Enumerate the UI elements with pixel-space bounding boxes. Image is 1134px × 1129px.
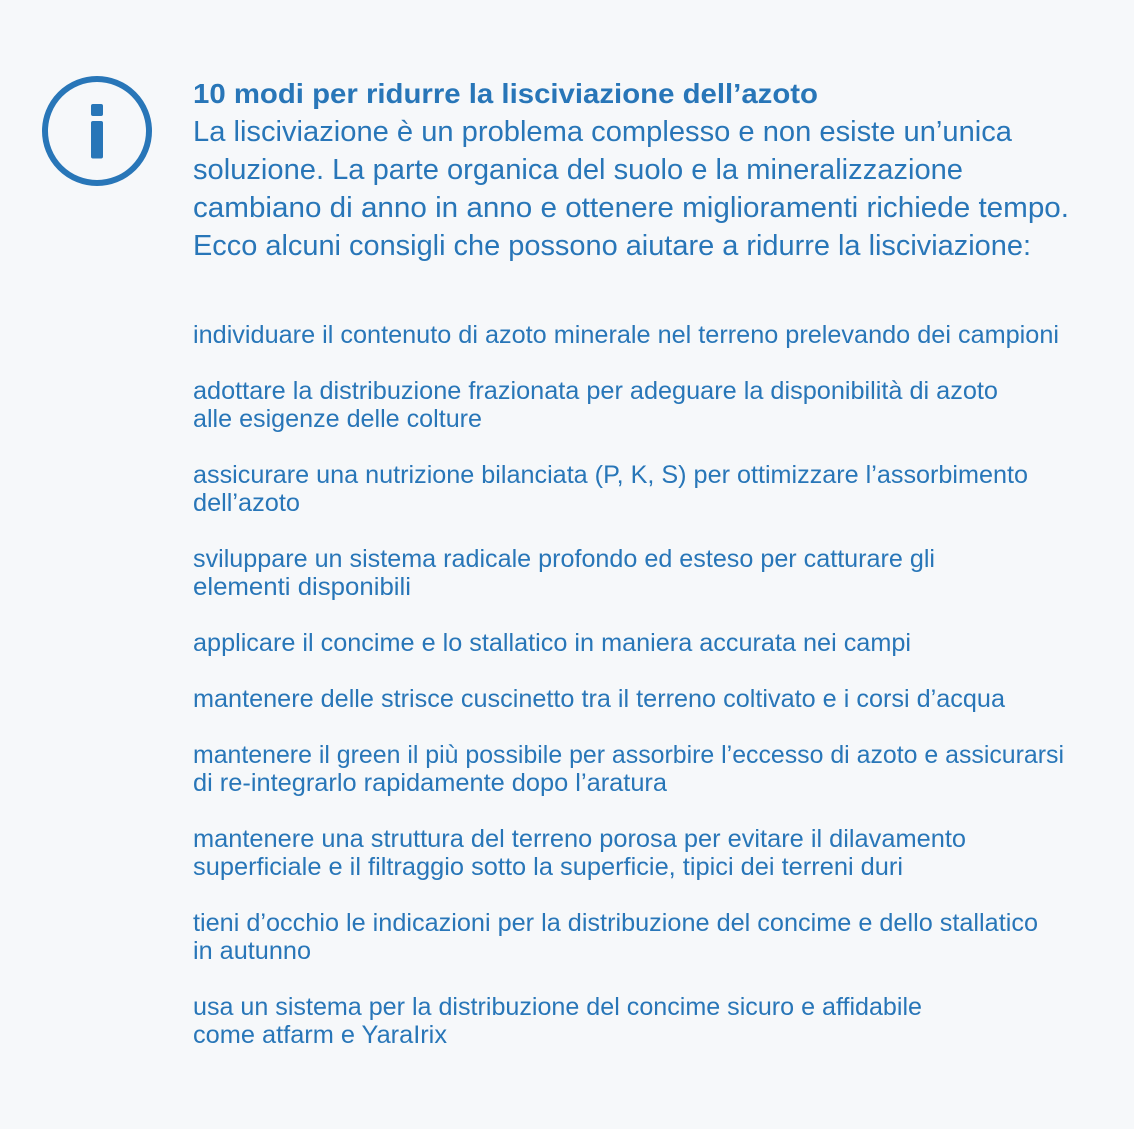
tip 1: individuare il contenuto di azoto minerale nel terreno prelevando dei campioni [193, 321, 1059, 349]
tip 9: tieni d’occhio le indicazioni per la distribuzione del concime e dello stallatico [193, 909, 1038, 937]
intro paragraph: soluzione. La parte organica del suolo e la mineralizzazione [193, 154, 963, 186]
tip 10: usa un sistema per la distribuzione del concime sicuro e affidabile [193, 993, 922, 1021]
list of tips [193, 321, 1064, 1049]
tip 3: assicurare una nutrizione bilanciata (P, K, S) per ottimizzare l’assorbimento [193, 461, 1028, 489]
tip 4: elementi disponibili [193, 573, 411, 601]
tip 9: in autunno [193, 937, 311, 965]
tip 2: alle esigenze delle colture [193, 405, 482, 433]
tip 7: mantenere il green il più possibile per assorbire l’eccesso di azoto e assicurarsi [193, 741, 1064, 769]
tip 6: mantenere delle strisce cuscinetto tra il terreno coltivato e i corsi d’acqua [193, 685, 1005, 713]
tip 8: superficiale e il filtraggio sotto la superficie, tipici dei terreni duri [193, 853, 903, 881]
tip 3 [193, 461, 1028, 517]
icon: info [45, 79, 149, 183]
intro paragraph: La lisciviazione è un problema complesso e non esiste un’unica [193, 116, 1013, 148]
intro paragraph: cambiano di anno in anno e ottenere miglioramenti richiede tempo. [193, 192, 1069, 224]
tip 9 [193, 909, 1038, 965]
tip 8 [193, 825, 966, 881]
tip 4 [193, 545, 935, 601]
tip 4: sviluppare un sistema radicale profondo ed esteso per catturare gli [193, 545, 935, 573]
tip 10: come atfarm e YaraIrix [193, 1021, 447, 1049]
tip 8: mantenere una struttura del terreno porosa per evitare il dilavamento [193, 825, 966, 853]
tip 3: dell’azoto [193, 489, 300, 517]
tip 7: di re-integrarlo rapidamente dopo l’aratura [193, 769, 667, 797]
tip 10 [193, 993, 922, 1049]
heading: 10 modi per ridurre la lisciviazione dell’azoto [193, 78, 818, 109]
tip 5: applicare il concime e lo stallatico in maniera accurata nei campi [193, 629, 911, 657]
tip 2: adottare la distribuzione frazionata per adeguare la disponibilità di azoto [193, 377, 998, 405]
intro paragraph [193, 116, 1069, 262]
intro paragraph: Ecco alcuni consigli che possono aiutare a ridurre la lisciviazione: [193, 230, 1031, 262]
tip 7 [193, 741, 1064, 797]
tip 2 [193, 377, 998, 433]
